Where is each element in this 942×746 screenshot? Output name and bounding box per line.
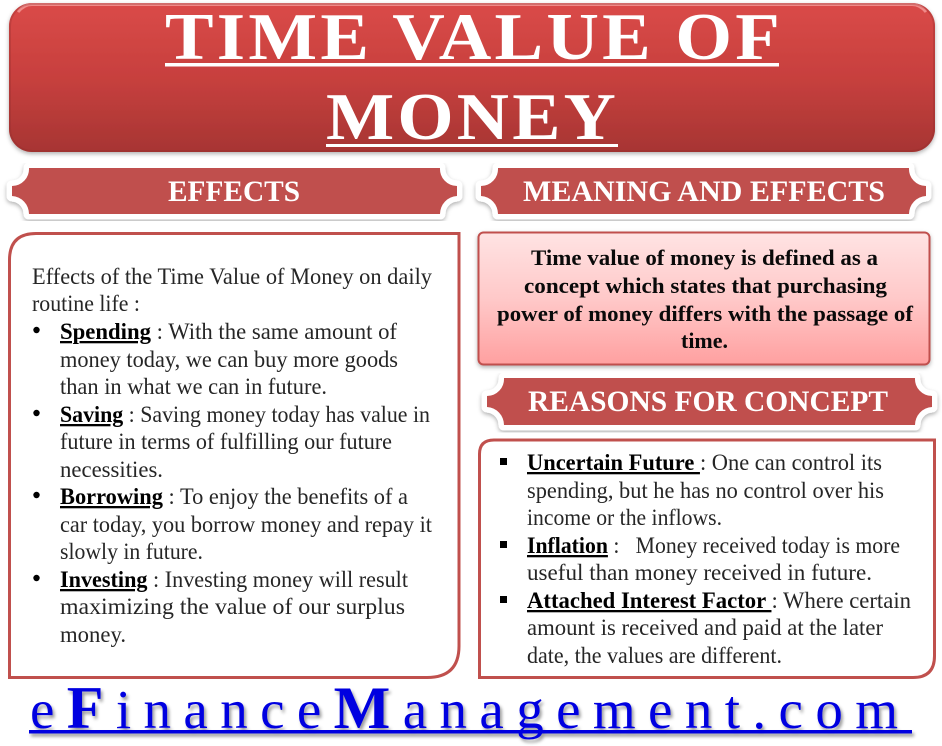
bullet: spending — [33, 319, 398, 399]
heading: effects — [12, 168, 457, 214]
effects intro — [32, 264, 432, 316]
bullet: spending: money today, we can buy more goods — [60, 347, 398, 372]
bullet: spending: Spending : With the same amount of — [60, 319, 397, 344]
heading: meaning and effects — [481, 168, 926, 214]
bullet: investing: maximizing the value of our surplus — [60, 594, 405, 619]
bullet: saving: future in terms of fulfilling our future — [60, 429, 392, 454]
panel: meaning definition: time. — [681, 328, 728, 353]
bullet: borrowing: Borrowing : To enjoy the benefits of a — [60, 484, 408, 509]
effects intro: Effects of the Time Value of Money on daily — [32, 264, 432, 289]
panel: meaning definition: concept which states that purchasing — [524, 273, 888, 298]
bullet: borrowing: slowly in future. — [60, 539, 203, 564]
bullet: uncertain future: income or the inflows. — [527, 505, 722, 530]
bullet: saving: Saving : Saving money today has value in — [60, 402, 430, 427]
heading: effects: EFFECTS — [168, 175, 300, 208]
panel: meaning definition: Time value of money is defined as a — [531, 245, 878, 270]
heading: reasons for concept: REASONS FOR CONCEPT — [528, 385, 888, 418]
bullet: borrowing: car today, you borrow money and repay it — [60, 512, 433, 537]
panel: effects — [10, 234, 459, 678]
title line 1: TIME VALUE OF — [165, 0, 783, 74]
heading: reasons for concept — [487, 378, 932, 425]
bullet: inflation — [500, 533, 900, 585]
bullet: investing — [33, 567, 409, 647]
bullet: saving: necessities. — [60, 457, 163, 482]
title line 2: MONEY — [326, 80, 619, 154]
bullet: uncertain future: Uncertain Future : One can control its — [527, 450, 882, 475]
heading: meaning and effects: MEANING AND EFFECTS — [523, 175, 885, 208]
effects intro: routine life : — [32, 291, 140, 316]
bullet: inflation: useful than money received in future. — [527, 560, 872, 585]
bullet: uncertain future: spending, but he has no control over his — [527, 478, 884, 503]
bullet: borrowing — [33, 484, 433, 564]
bullet: attached interest factor: Attached Interest Factor : Where certain — [527, 588, 911, 613]
bullet: saving — [33, 402, 430, 482]
title banner — [9, 0, 935, 154]
bullet: inflation: Inflation : Money received today is more — [527, 533, 900, 558]
bullet: spending: than in what we can in future. — [60, 374, 327, 399]
panel: reasons — [480, 440, 934, 678]
panel: meaning definition — [478, 232, 930, 364]
footer website name: eFinanceManagement.com — [30, 675, 898, 741]
bullet: attached interest factor: date, the values are different. — [527, 643, 782, 668]
bullet: investing: money. — [60, 622, 126, 647]
panel: meaning definition: power of money differs with the passage of — [497, 301, 914, 326]
bullet: attached interest factor: amount is received and paid at the later — [527, 615, 883, 640]
bullet: uncertain future — [500, 450, 884, 530]
bullet: attached interest factor — [500, 588, 911, 668]
bullet: investing: Investing : Investing money will result — [60, 567, 409, 592]
